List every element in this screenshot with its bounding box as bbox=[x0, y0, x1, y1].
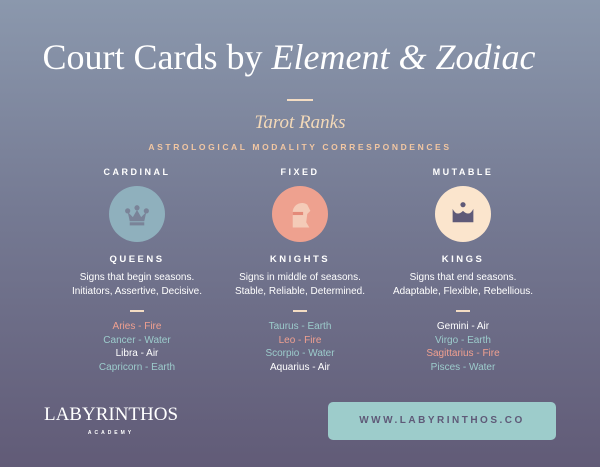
button: website bbox=[328, 402, 556, 440]
panel: cardinal: QUEENS bbox=[109, 254, 165, 265]
panel: mutable bbox=[393, 167, 533, 372]
panel: fixed: Aquarius - Air bbox=[270, 362, 330, 372]
panel: mutable: Sagittarius - Fire bbox=[426, 348, 500, 359]
icon: queen crown bbox=[109, 186, 165, 242]
subheading: ASTROLOGICAL MODALITY CORRESPONDENCES bbox=[148, 142, 452, 152]
logo: LABYRINTHOS bbox=[44, 404, 178, 425]
subtitle: Tarot Ranks: Tarot Ranks bbox=[254, 112, 345, 133]
panel: fixed: Taurus - Earth bbox=[269, 321, 331, 332]
panel: cardinal: CARDINAL bbox=[104, 167, 170, 177]
logo bbox=[44, 404, 178, 436]
panel: mutable: Pisces - Water bbox=[431, 362, 495, 372]
panel: cardinal: Initiators, Assertive, Decisive. bbox=[72, 286, 202, 297]
panel: mutable: Virgo - Earth bbox=[435, 334, 491, 346]
title: Court Cards by Element & Zodiac bbox=[43, 37, 535, 77]
panel: mutable: MUTABLE bbox=[433, 167, 493, 177]
panel: fixed: Signs in middle of seasons. bbox=[239, 272, 361, 283]
panel: fixed bbox=[235, 167, 365, 372]
panel: cardinal bbox=[72, 167, 202, 372]
panel: mutable: Adaptable, Flexible, Rebellious. bbox=[393, 286, 533, 297]
panel: fixed: FIXED bbox=[280, 167, 320, 177]
panel: cardinal: Aries - Fire bbox=[113, 321, 161, 332]
panel: fixed: Scorpio - Water bbox=[265, 348, 335, 359]
panel: fixed: Leo - Fire bbox=[279, 334, 321, 346]
icon: knight helmet bbox=[272, 186, 328, 242]
panel: cardinal: Libra - Air bbox=[116, 348, 158, 359]
panel: cardinal: Cancer - Water bbox=[103, 334, 171, 346]
panel: mutable: Signs that end seasons. bbox=[410, 272, 516, 283]
logo: ACADEMY bbox=[88, 430, 134, 436]
panel: cardinal: Signs that begin seasons. bbox=[80, 272, 194, 283]
panel: cardinal: Capricorn - Earth bbox=[99, 362, 175, 372]
panel: mutable: KINGS bbox=[442, 254, 484, 265]
button: website: WWW.LABYRINTHOS.CO bbox=[359, 415, 525, 426]
divider accent bbox=[287, 99, 313, 101]
panel: mutable: Gemini - Air bbox=[437, 321, 489, 332]
icon: king crown bbox=[435, 186, 491, 242]
panel: fixed: Stable, Reliable, Determined. bbox=[235, 286, 365, 297]
panel: fixed: KNIGHTS bbox=[270, 254, 330, 265]
